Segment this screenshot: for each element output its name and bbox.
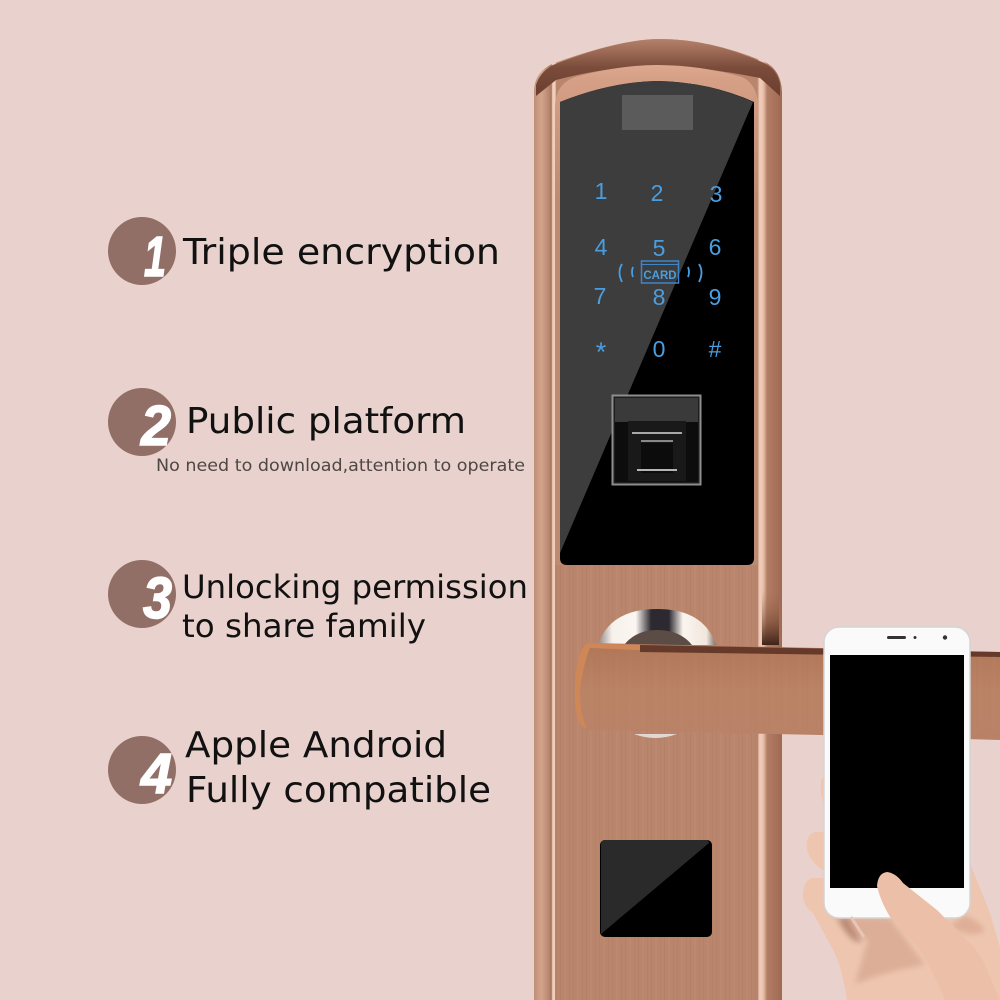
phone earpiece and camera bbox=[887, 635, 947, 640]
lock top cap bbox=[536, 39, 780, 96]
card reader symbol bbox=[620, 261, 702, 283]
keypad: 1 bbox=[595, 178, 607, 204]
silver knob bbox=[598, 609, 716, 738]
feature 4: platform compatibility bbox=[108, 725, 491, 811]
rim around touch panel bbox=[555, 65, 758, 200]
keypad: # bbox=[709, 336, 722, 362]
keypad: 0 bbox=[653, 336, 665, 362]
heading: unlocking permission: Unlocking permission bbox=[182, 568, 528, 606]
plate around touch panel bbox=[555, 200, 758, 580]
keypad: 6 bbox=[709, 234, 721, 260]
touch panel bbox=[560, 81, 754, 565]
charging cable bbox=[851, 917, 864, 937]
smartphone bbox=[824, 627, 970, 937]
keypad: 4 bbox=[595, 234, 608, 260]
door lock bottom reader bbox=[600, 840, 712, 937]
door lock body bbox=[534, 39, 782, 1000]
feature 3: unlocking permission bbox=[108, 560, 528, 645]
phone case bbox=[824, 627, 970, 918]
keypad: 8 bbox=[653, 284, 665, 310]
keypad: 2 bbox=[651, 180, 663, 206]
heading: public platform: Public platform bbox=[186, 401, 466, 442]
keypad: 3 bbox=[710, 181, 722, 207]
lock plate bbox=[534, 39, 782, 1000]
icon: number badge 4 bbox=[108, 736, 176, 806]
heading: unlocking permission: to share family bbox=[182, 607, 426, 645]
keypad: 7 bbox=[594, 283, 606, 309]
feature 1: triple encryption bbox=[108, 217, 500, 289]
keypad: * bbox=[596, 337, 607, 367]
icon: number badge 1: 1 bbox=[144, 225, 166, 289]
panel glass reflection bbox=[560, 81, 753, 553]
icon: number badge 3: 3 bbox=[143, 566, 172, 631]
door handle bbox=[575, 643, 1000, 740]
dark shadow on plate beside handle bbox=[762, 590, 779, 645]
icon: number badge 2 bbox=[108, 388, 176, 458]
icon: number badge 1 bbox=[108, 217, 176, 289]
hand shadow under phone bbox=[832, 915, 984, 984]
keypad: 5 bbox=[653, 235, 665, 261]
brushed lower plate bbox=[555, 565, 758, 1000]
heading: triple encryption: Triple encryption bbox=[182, 232, 500, 273]
keypad bbox=[594, 178, 722, 367]
display window bbox=[622, 95, 693, 130]
feature 2: public platform bbox=[108, 388, 525, 476]
text: public platform note: No need to download,attention to operate bbox=[156, 456, 525, 476]
heading: apple android compatible: Fully compatible bbox=[186, 770, 491, 811]
thumb over phone bbox=[877, 872, 1000, 1000]
card reader symbol: CARD bbox=[643, 270, 677, 282]
icon: number badge 4: 4 bbox=[140, 742, 172, 806]
fingerprint reader bbox=[612, 396, 700, 484]
heading: apple android compatible bbox=[185, 725, 491, 811]
icon: number badge 2: 2 bbox=[140, 394, 171, 458]
icon: number badge 3 bbox=[108, 560, 176, 631]
heading: apple android compatible: Apple Android bbox=[185, 725, 447, 766]
keypad: 9 bbox=[709, 284, 721, 310]
heading: unlocking permission bbox=[182, 568, 528, 645]
hand behind phone bbox=[803, 778, 1000, 1000]
phone screen bbox=[830, 655, 964, 888]
